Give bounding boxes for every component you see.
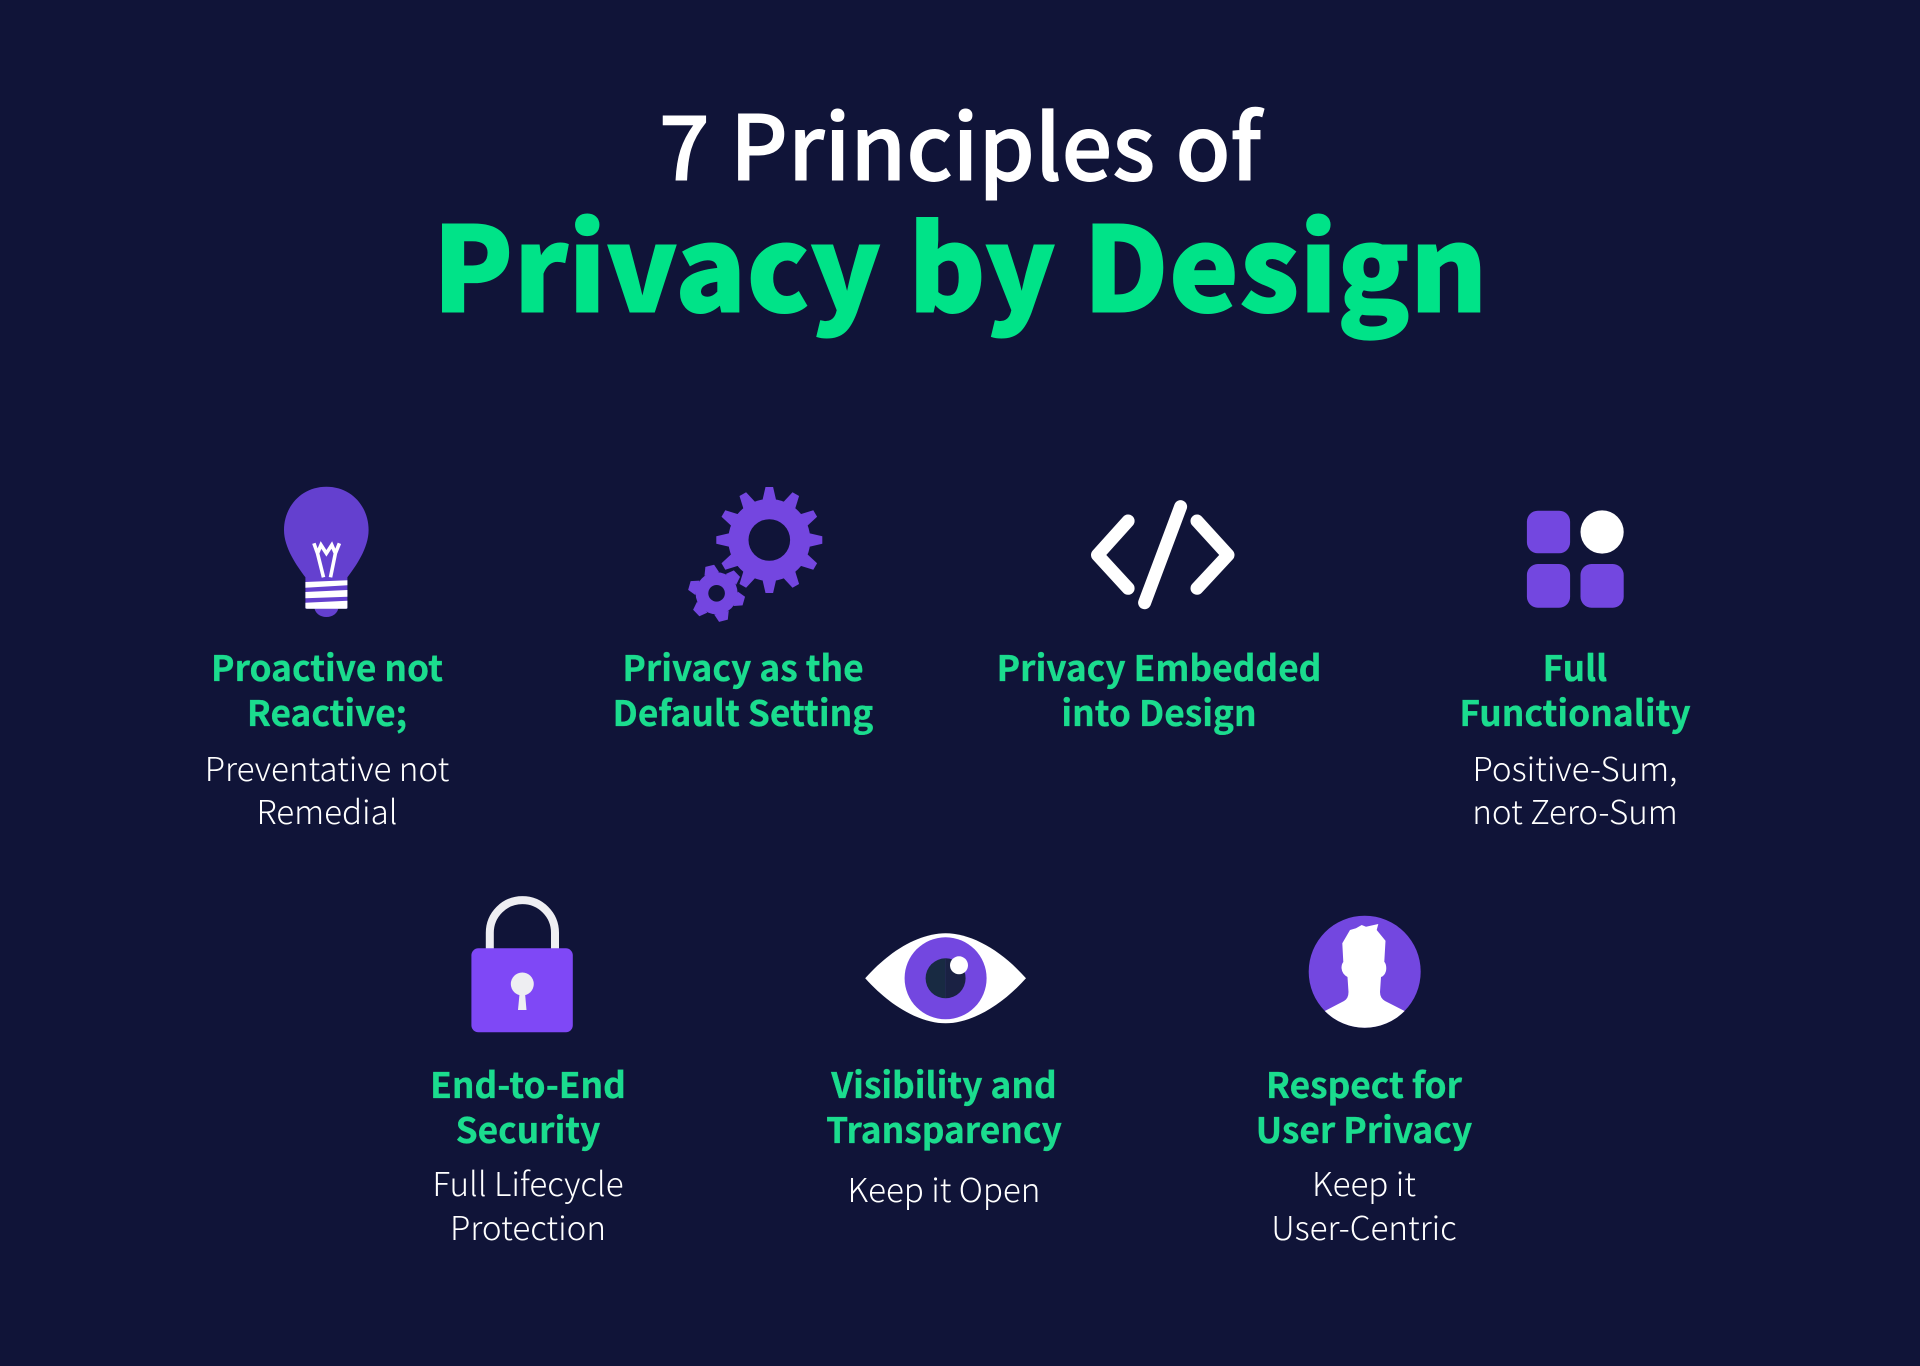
description: Keep it bbox=[1312, 1157, 1416, 1206]
heading bbox=[1459, 640, 1691, 736]
panel: end-to-end security bbox=[430, 896, 626, 1250]
heading bbox=[211, 640, 443, 736]
icon: gears bbox=[688, 487, 822, 622]
panel: visibility and transparency bbox=[826, 933, 1062, 1212]
title: Privacy by Design: Privacy by Design bbox=[432, 175, 1488, 346]
heading: Security bbox=[456, 1102, 600, 1154]
description: User-Centric bbox=[1271, 1201, 1457, 1250]
description: Preventative not bbox=[205, 742, 449, 790]
panel: proactive not reactive bbox=[205, 486, 449, 834]
description bbox=[432, 1157, 624, 1250]
icon: user avatar bbox=[1308, 916, 1421, 1028]
heading: Default Setting bbox=[613, 686, 873, 736]
description bbox=[1271, 1157, 1457, 1250]
heading: Visibility and bbox=[831, 1058, 1057, 1108]
description bbox=[1472, 742, 1678, 834]
heading bbox=[1256, 1058, 1472, 1154]
icon: app grid bbox=[1526, 510, 1624, 608]
heading: Functionality bbox=[1459, 686, 1691, 736]
panel: privacy embedded into design bbox=[997, 500, 1321, 736]
heading: User Privacy bbox=[1256, 1102, 1472, 1154]
panel: full functionality bbox=[1459, 510, 1691, 834]
heading: Transparency bbox=[826, 1102, 1062, 1154]
panel: privacy as the default setting bbox=[613, 487, 873, 736]
heading: Privacy Embedded bbox=[997, 640, 1321, 692]
heading bbox=[430, 1058, 626, 1154]
title: 7 Principles of: 7 Principles of bbox=[659, 76, 1261, 206]
panel: respect for user privacy bbox=[1256, 916, 1472, 1250]
icon: padlock bbox=[471, 896, 573, 1032]
heading: Reactive; bbox=[247, 686, 407, 736]
heading: End-to-End bbox=[430, 1058, 626, 1108]
heading: Privacy as the bbox=[622, 640, 864, 692]
heading: into Design bbox=[1061, 686, 1257, 736]
heading bbox=[826, 1058, 1062, 1154]
heading: Proactive not bbox=[211, 640, 443, 692]
description: Keep it Open bbox=[848, 1162, 1040, 1212]
heading bbox=[613, 640, 873, 736]
description: Positive-Sum, bbox=[1473, 742, 1677, 790]
description: Full Lifecycle bbox=[432, 1157, 624, 1206]
description: Remedial bbox=[256, 785, 398, 834]
description bbox=[205, 742, 449, 834]
icon: light bulb bbox=[284, 486, 369, 617]
heading: Full bbox=[1543, 640, 1607, 692]
icon: eye bbox=[865, 933, 1026, 1024]
heading: Respect for bbox=[1266, 1058, 1462, 1108]
description: Protection bbox=[450, 1201, 606, 1250]
heading bbox=[997, 640, 1321, 736]
description: not Zero-Sum bbox=[1472, 785, 1678, 834]
icon: code brackets bbox=[1091, 500, 1234, 610]
